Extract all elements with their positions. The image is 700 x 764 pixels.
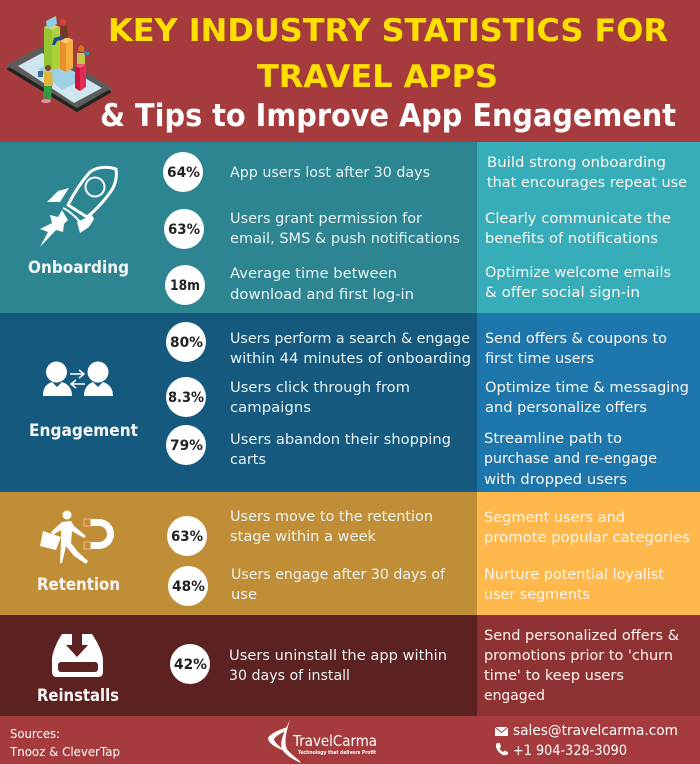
text: tip: [484, 628, 679, 704]
text: tips: Nurture potential loyalist: [484, 567, 664, 583]
logo: TravelCarma: [268, 720, 377, 763]
logo: TravelCarma: Technology that delivers Profit: [298, 750, 376, 756]
text: tips: Optimize welcome emails: [485, 265, 671, 281]
text: tips: that encourages repeat use: [487, 175, 687, 191]
text: stat description: [229, 648, 447, 684]
heading: engagement: Engagement: [29, 421, 138, 441]
text: tips: Clearly communicate the: [485, 211, 671, 227]
stat: 79%: [166, 425, 206, 465]
text: tips: [484, 331, 689, 488]
text: stat descriptions: [230, 331, 471, 468]
stat: 64%: [163, 152, 203, 192]
stat: 42%: 42%: [174, 657, 207, 673]
stat: 63%: [167, 516, 207, 556]
heading: retention: Retention: [37, 575, 120, 595]
text: tip: Send personalized offers &: [484, 628, 679, 644]
text: stat descriptions: stage within a week: [230, 529, 377, 545]
text: stat descriptions: email, SMS & push notifications: [230, 231, 460, 247]
stat: 63%: 63%: [171, 529, 203, 545]
heading: reinstalls: Reinstalls: [37, 686, 119, 706]
title: KEY INDUSTRY STATISTICS FOR: [108, 13, 668, 49]
stat: 64%: 64%: [167, 165, 200, 181]
contact: phone: +1 904-328-3090: [513, 743, 627, 759]
stat: 42%: [170, 644, 210, 684]
text: stat descriptions: Average time between: [230, 266, 397, 282]
text: stat descriptions: Users abandon their shopping: [230, 432, 451, 448]
text: tips: with dropped users: [484, 472, 627, 488]
heading: onboarding: Onboarding: [28, 258, 129, 278]
text: tip: time' to keep users: [484, 668, 624, 684]
stat: 18m: 18m: [170, 278, 200, 294]
text: stat descriptions: [230, 165, 460, 303]
stat: 63%: [164, 209, 204, 249]
text: stat descriptions: Users engage after 30 days of: [231, 567, 446, 583]
stat: 8.3%: [166, 377, 206, 417]
text: tips: Segment users and: [484, 510, 625, 526]
text: stat descriptions: Users click through from: [230, 380, 410, 396]
text: stat description: Users uninstall the app within: [229, 648, 447, 664]
text: tips: and personalize offers: [485, 400, 647, 416]
text: stat descriptions: Users grant permission for: [230, 211, 422, 227]
stat: 48%: [168, 566, 208, 606]
text: stat descriptions: within 44 minutes of onboarding: [230, 351, 471, 367]
text: tips: user segments: [484, 587, 590, 603]
illustration: phone with bar chart and people: [8, 16, 110, 111]
icon: person pulled by magnet: [40, 510, 114, 564]
text: tips: [484, 510, 690, 603]
text: stat descriptions: App users lost after 30 days: [230, 165, 430, 181]
stat: 8.3%: 8.3%: [168, 390, 204, 406]
text: tips: Streamline path to: [484, 431, 622, 447]
text: tips: [485, 155, 687, 301]
text: tips: Send offers & coupons to: [485, 331, 667, 347]
text: tips: Optimize time & messaging: [485, 380, 689, 396]
text: stat descriptions: [230, 509, 446, 603]
panel: retention: [0, 492, 700, 615]
text: tip: engaged: [484, 688, 545, 704]
panel: engagement: [0, 313, 700, 492]
text: tip: promotions prior to 'churn: [484, 648, 673, 664]
text: tips: Build strong onboarding: [487, 155, 666, 171]
text: tips: purchase and re-engage: [484, 451, 657, 467]
text: tips: & offer social sign-in: [485, 285, 640, 301]
text: tips: first time users: [485, 351, 594, 367]
footer: sources: Tnooz & CleverTap: [9, 744, 120, 759]
panel: onboarding: [0, 142, 700, 313]
text: stat descriptions: Users move to the retention: [230, 509, 433, 525]
title: [100, 13, 676, 134]
title: TRAVEL APPS: [257, 59, 498, 95]
icon: download tray: [52, 634, 103, 677]
stat: 48%: 48%: [172, 579, 205, 595]
text: stat descriptions: use: [231, 587, 257, 603]
text: stat descriptions: campaigns: [230, 400, 311, 416]
stat: 18m: [165, 265, 205, 305]
text: stat descriptions: Users perform a search & engage: [230, 331, 470, 347]
icon: two people exchanging: [43, 362, 113, 396]
stat: 80%: 80%: [170, 335, 203, 351]
text: stat descriptions: download and first log-in: [230, 287, 414, 303]
text: stat description: 30 days of install: [229, 668, 350, 684]
stat: 80%: [166, 322, 206, 362]
panel: reinstalls: [0, 615, 700, 716]
icon: rocket: [40, 167, 116, 247]
stat: 63%: 63%: [168, 222, 200, 238]
text: tips: benefits of notifications: [485, 231, 658, 247]
stat: 79%: 79%: [170, 438, 203, 454]
logo: TravelCarma: TravelCarma: [292, 732, 377, 750]
contact: email: sales@travelcarma.com: [513, 723, 678, 739]
text: stat descriptions: carts: [230, 452, 266, 468]
footer: sources: Sources:: [10, 726, 60, 741]
text: tips: promote popular categories: [484, 530, 690, 546]
footer: sources: [9, 726, 120, 759]
